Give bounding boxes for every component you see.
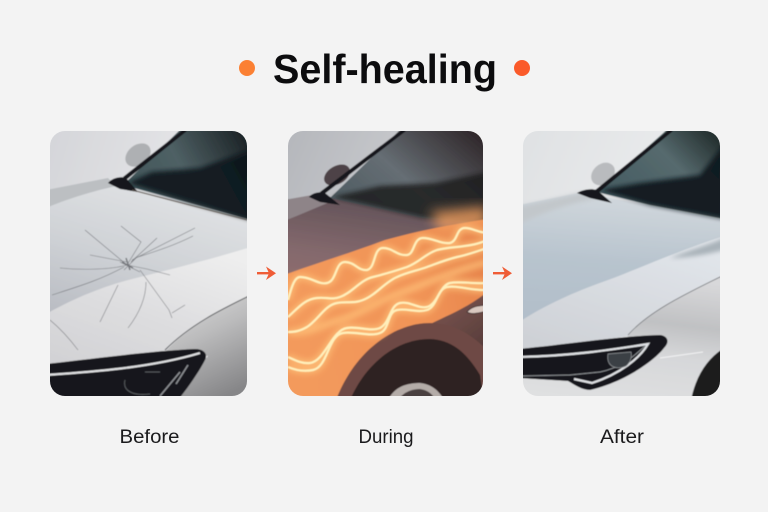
heat glow bbox=[284, 219, 487, 400]
label: Before: Before bbox=[120, 427, 180, 448]
panel: during bbox=[284, 127, 487, 400]
windshield bbox=[597, 127, 724, 219]
panel: before bbox=[46, 127, 251, 400]
heading: Self-healing: Self-healing bbox=[273, 46, 497, 92]
windshield bbox=[127, 131, 247, 220]
icon: left orange dot bbox=[239, 60, 255, 76]
fender line bbox=[628, 275, 724, 335]
title bbox=[239, 46, 530, 92]
headlight bbox=[46, 349, 206, 400]
windshield bbox=[330, 131, 483, 219]
label: During: During bbox=[358, 427, 414, 448]
icon: right orange dot bbox=[514, 60, 530, 76]
cracks bbox=[50, 226, 195, 350]
fender line bbox=[165, 295, 251, 350]
icon: side mirror bbox=[590, 162, 616, 186]
arrow: before to during bbox=[257, 266, 276, 280]
panel: after bbox=[519, 127, 724, 400]
wheel arch bbox=[691, 350, 720, 396]
arrow: during to after bbox=[493, 266, 512, 280]
label: After: After bbox=[600, 427, 645, 448]
icon: side mirror bbox=[125, 143, 151, 167]
headlight bbox=[519, 335, 667, 390]
icon: side mirror bbox=[324, 164, 350, 186]
glowing waves bbox=[288, 228, 487, 371]
side panel bbox=[432, 294, 483, 348]
wheel arch bbox=[336, 323, 487, 400]
